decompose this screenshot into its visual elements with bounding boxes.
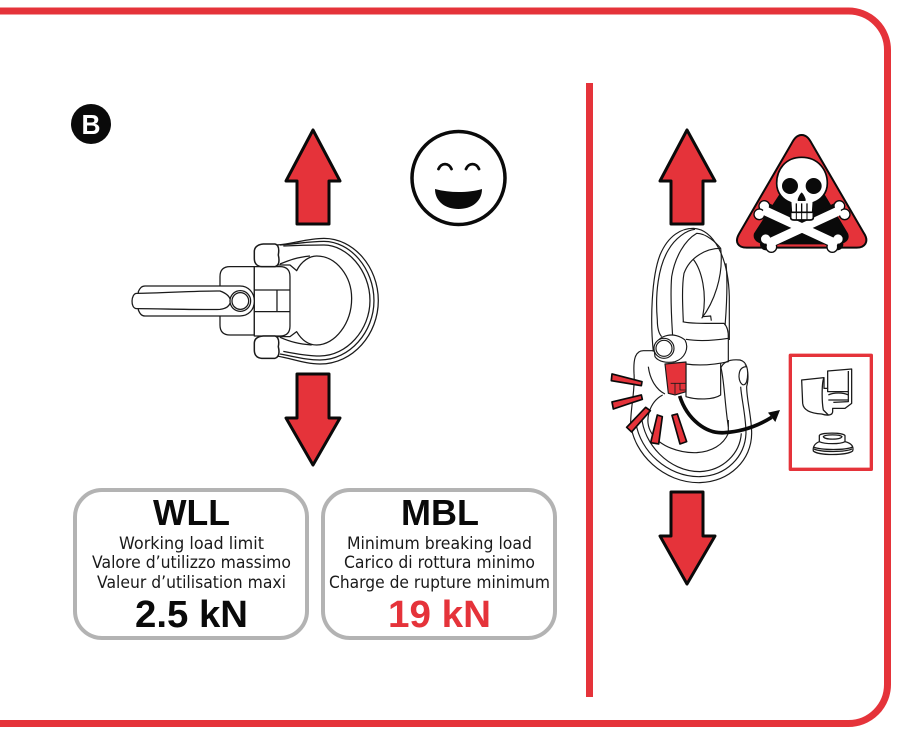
stats box: WLL xyxy=(75,490,307,638)
stats box: MBL: MBL xyxy=(401,492,479,533)
arrow: right down xyxy=(660,492,715,584)
badge B: B xyxy=(82,109,100,140)
stats box: MBL: Carico di rottura minimo xyxy=(344,553,535,572)
arrow: left up xyxy=(286,130,340,224)
stats box: MBL: 19 kN xyxy=(388,594,491,636)
arrow: right up xyxy=(660,130,715,224)
stats box: MBL: Charge de rupture minimum xyxy=(329,573,550,592)
icon: smiley face xyxy=(412,132,505,224)
stats box: WLL: Valore d’utilizzo massimo xyxy=(92,553,291,572)
stats box: MBL: Minimum breaking load xyxy=(347,534,532,553)
inset: spare parts xyxy=(790,355,871,469)
icon: skull warning triangle xyxy=(737,135,866,252)
arrow: left down xyxy=(286,374,340,465)
vertical divider xyxy=(586,83,593,697)
badge B xyxy=(71,104,111,144)
illustration: shackle with broken part xyxy=(611,228,780,483)
stats box: WLL: Working load limit xyxy=(119,534,265,553)
illustration: shackle, horizontal view xyxy=(132,238,378,364)
stats box: WLL: 2.5 kN xyxy=(135,594,248,636)
stats box: MBL xyxy=(323,490,555,638)
stats box: WLL: Valeur d’utilisation maxi xyxy=(97,573,286,592)
stats box: WLL: WLL xyxy=(153,492,230,533)
